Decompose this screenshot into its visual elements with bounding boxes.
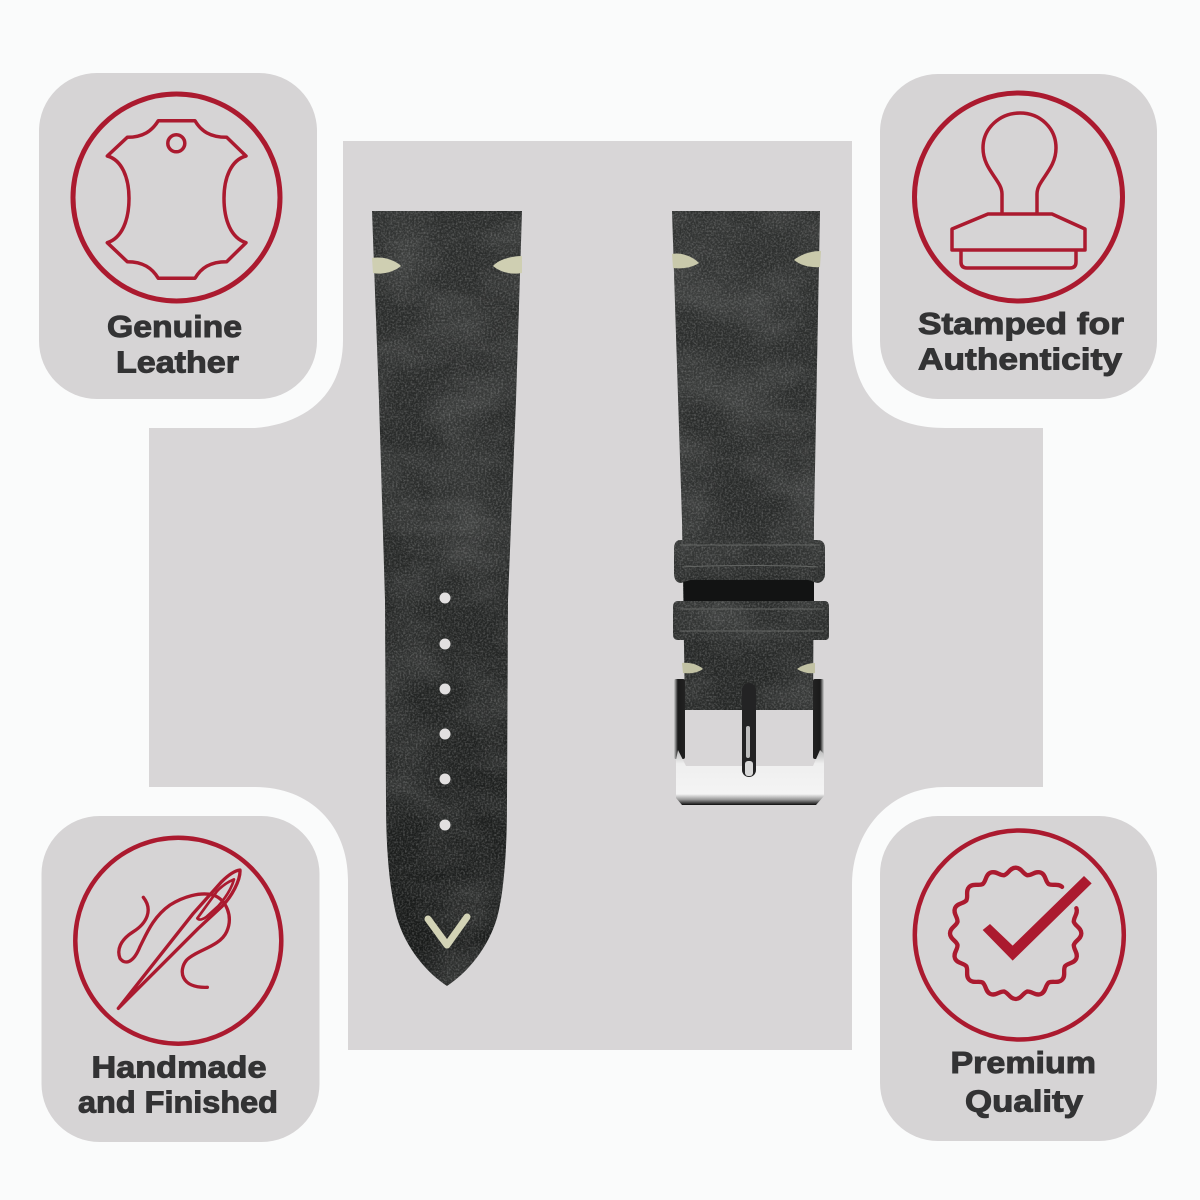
icon: stamp (952, 113, 1085, 268)
buckle pin (742, 683, 756, 777)
keeper edge lines (680, 545, 824, 631)
icon ring (915, 830, 1124, 1040)
keeper shadow (684, 580, 814, 602)
check mark (983, 876, 1092, 961)
wavy seal outline (950, 868, 1081, 999)
right strap with keepers and buckle (672, 211, 829, 805)
heading (78, 1050, 278, 1120)
icon: needle and thread (118, 870, 240, 1008)
left strap (long piece) (372, 211, 522, 986)
heading: Leather (116, 344, 239, 380)
strap body (672, 211, 820, 710)
heading: Genuine (107, 309, 242, 344)
lower stitches (682, 663, 815, 673)
card: premium quality (880, 816, 1157, 1141)
heading (918, 306, 1124, 376)
card: handmade and finished (42, 816, 320, 1142)
buckle (674, 679, 824, 805)
right frame bar (813, 679, 824, 759)
upper stitches (372, 256, 522, 274)
heading: and Finished (78, 1085, 278, 1120)
heading (107, 309, 242, 380)
icon: leather hide (107, 121, 246, 278)
upper keeper loop (674, 540, 825, 583)
heading: Premium (950, 1045, 1096, 1080)
icon ring (73, 94, 280, 301)
heading: Quality (965, 1084, 1084, 1119)
icon ring (914, 93, 1122, 301)
strap body (372, 211, 522, 986)
icon ring (75, 838, 281, 1044)
card background (42, 816, 320, 1142)
icon: seal with check mark (950, 868, 1092, 999)
card: stamped for authenticity (880, 74, 1157, 399)
card: genuine leather (39, 73, 317, 399)
lower keeper loop (673, 601, 829, 640)
heading: Authenticity (918, 342, 1123, 376)
bottom polished bar (676, 750, 824, 805)
card background (39, 73, 317, 399)
V stitch at tip (428, 917, 467, 945)
card background (880, 74, 1157, 399)
card background (880, 816, 1157, 1141)
upper stitches (672, 251, 821, 268)
central grey backdrop panel (149, 141, 1043, 1050)
heading: Handmade (92, 1050, 266, 1085)
left frame bar (674, 679, 685, 759)
heading: Stamped for (918, 306, 1124, 341)
heading (950, 1045, 1096, 1119)
buckle holes (440, 592, 450, 830)
